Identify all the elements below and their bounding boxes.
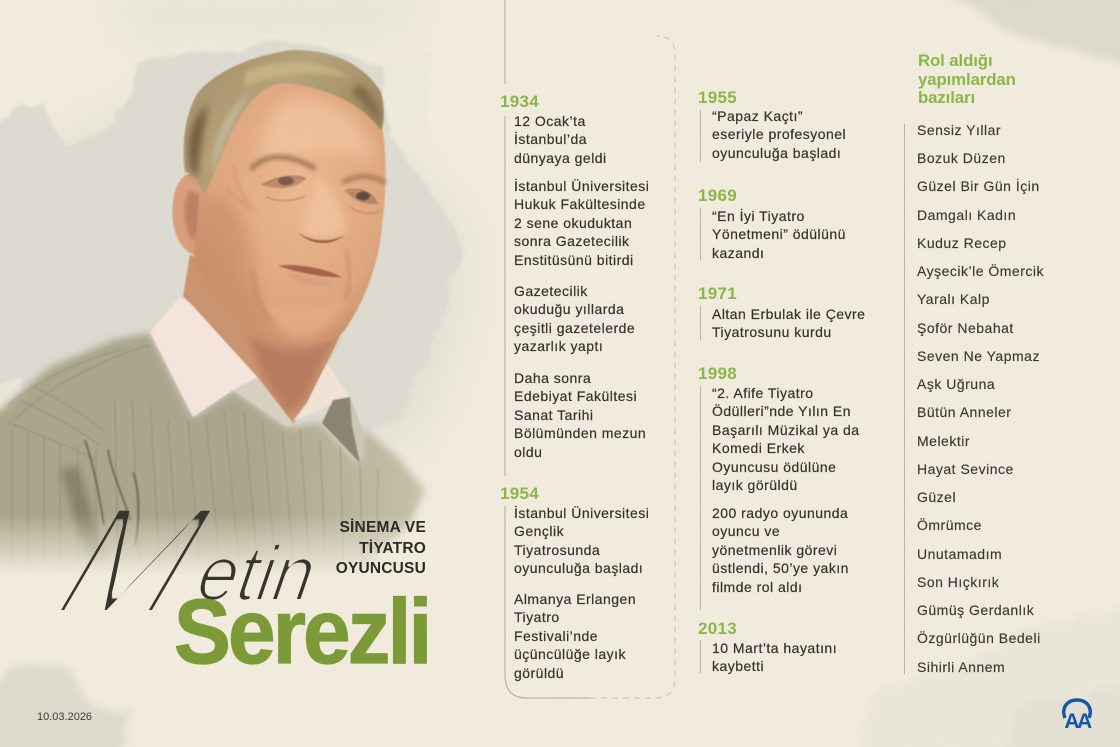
timeline column 1: Enstitüsünü bitirdi [514, 252, 634, 268]
film titles: Unutamadım [917, 546, 1002, 562]
year 1954: 1954 [500, 484, 539, 503]
timeline column 1: Festivali’nde [514, 628, 598, 644]
1971 entry [712, 306, 865, 340]
1998 entries: “2. Afife Tiyatro [712, 385, 814, 401]
1998 entries [712, 385, 860, 494]
timeline column 1: okuduğu yıllarda [514, 301, 624, 317]
1954 entries: Gençlik [514, 523, 564, 539]
1954 entries: oyunculuğa başladı [514, 560, 643, 576]
productions heading [918, 51, 1016, 107]
column 2 line 2013 [700, 640, 701, 673]
year 1971: 1971 [698, 284, 737, 303]
1969 entry: Yönetmeni” ödülünü [712, 226, 846, 242]
shirt collar [150, 297, 362, 463]
timeline column 1: Daha sonra [514, 370, 591, 386]
film titles: Bütün Anneler [917, 404, 1011, 420]
subtitle: profession: SİNEMA VE [340, 519, 426, 536]
year 1934: 1934 [500, 92, 539, 111]
1934 entries: dünyaya geldi [514, 150, 607, 166]
timeline column 2: filmde rol aldı [712, 579, 802, 595]
film titles: Aşk Uğruna [917, 376, 995, 392]
1998 entries: Ödülleri”nde Yılın En [712, 403, 851, 419]
name: Metin (script) [37, 495, 321, 646]
2013 entry: 10 Mart’ta hayatını [712, 640, 837, 656]
1971 entry: Tiyatrosunu kurdu [712, 324, 832, 340]
film titles: Güzel Bir Gün İçin [917, 178, 1040, 194]
timeline column 1: görüldü [514, 665, 564, 681]
timeline connector lines [504, 0, 676, 699]
eyes [262, 176, 380, 213]
1934 entries: İstanbul’da [514, 131, 587, 147]
film titles: Gümüş Gerdanlık [917, 602, 1034, 618]
productions heading: Rol aldığı [918, 51, 993, 70]
timeline column 1: 2 sene okuduktan [514, 215, 632, 231]
name: Metin (script): etin [192, 530, 321, 617]
film titles: Şoför Nebahat [917, 320, 1014, 336]
film titles: Kuduz Recep [917, 235, 1007, 251]
1955 entry [712, 108, 846, 162]
subtitle: profession [336, 518, 426, 577]
film titles: Güzel [917, 489, 956, 505]
timeline column 1: Almanya Erlangen [514, 591, 636, 607]
1954 entries: İstanbul Üniversitesi [514, 505, 649, 521]
2013 entry: kaybetti [712, 658, 764, 674]
timeline column 2: 200 radyo oyununda [712, 505, 848, 521]
1969 entry [712, 208, 846, 261]
productions heading: yapımlardan [918, 70, 1016, 88]
column 2 line 1955 [700, 110, 701, 162]
column 2 line 1969 [700, 208, 701, 260]
timeline column 1: İstanbul Üniversitesi [514, 178, 649, 194]
film titles: Sensiz Yıllar [917, 122, 1001, 138]
date: 10.03.2026 [37, 711, 92, 723]
icon: AA logo [1062, 698, 1092, 730]
timeline column 1: Edebiyat Fakültesi [514, 388, 637, 404]
productions list line [904, 124, 905, 674]
1998 entries: Komedi Erkek [712, 440, 805, 456]
timeline column 2: üstlendi, 50’ye yakın [712, 560, 849, 576]
productions heading: bazıları [918, 88, 975, 107]
timeline column 1: üçüncülüğe layık [514, 646, 626, 662]
hair [183, 50, 384, 194]
name: Serezli: Serezli [174, 580, 430, 680]
column 2 line 1998 [700, 386, 701, 610]
timeline column 2: yönetmenlik görevi [712, 542, 837, 558]
film titles: Seven Ne Yapmaz [917, 348, 1040, 364]
timeline column 1: yazarlık yaptı [514, 338, 603, 354]
film titles: Melektir [917, 433, 970, 449]
1934 entries: 12 Ocak’ta [514, 113, 586, 129]
timeline column 1: Sanat Tarihi [514, 407, 593, 423]
subtitle: profession: OYUNCUSU [336, 560, 426, 577]
timeline column 1 [500, 92, 649, 682]
face shading [198, 99, 375, 338]
year 1955: 1955 [698, 88, 737, 107]
1969 entry: “En İyi Tiyatro [712, 208, 805, 224]
film titles: Son Hıçkırık [917, 574, 999, 590]
column 2 line 1971 [700, 306, 701, 340]
eyebrows [252, 157, 384, 182]
neck [183, 255, 345, 424]
face [194, 70, 386, 345]
1969 entry: kazandı [712, 245, 764, 261]
1954 entries: Tiyatrosunda [514, 542, 600, 558]
sweater [0, 333, 425, 580]
timeline column 1: Bölümünden mezun [514, 425, 646, 441]
year 2013: 2013 [698, 619, 737, 638]
1955 entry: eseriyle profesyonel [712, 126, 846, 142]
year 1969: 1969 [698, 186, 737, 205]
film titles: Bozuk Düzen [917, 150, 1006, 166]
timeline column 1: sonra Gazetecilik [514, 233, 630, 249]
1955 entry: oyunculuğa başladı [712, 145, 841, 161]
film titles: Ömrümce [917, 517, 982, 533]
year 1998: 1998 [698, 364, 737, 383]
timeline column 1: Tiyatro [514, 609, 560, 625]
film titles: Yaralı Kalp [917, 291, 990, 307]
subtitle: profession: TİYATRO [359, 540, 426, 556]
nose [298, 175, 345, 243]
timeline column 1: Hukuk Fakültesinde [514, 196, 646, 212]
ear [172, 172, 212, 256]
1998 entries: Başarılı Müzikal ya da [712, 422, 860, 438]
2013 entry [712, 640, 837, 674]
1955 entry: “Papaz Kaçtı” [712, 108, 803, 124]
timeline column 2: oyuncu ve [712, 523, 780, 539]
timeline column 1: Gazetecilik [514, 283, 588, 299]
film titles: Hayat Sevince [917, 461, 1014, 477]
1998 entries: layık görüldü [712, 477, 798, 493]
1998 entries: Oyuncusu ödülüne [712, 459, 836, 475]
1954 entries [514, 505, 649, 576]
film titles: Özgürlüğün Bedeli [917, 630, 1041, 646]
film titles: Damgalı Kadın [917, 207, 1016, 223]
film titles: Ayşecik’le Ömercik [917, 263, 1044, 279]
film titles: Sihirli Annem [917, 659, 1005, 675]
portrait of Metin Serezli [0, 49, 428, 570]
timeline column 2 [698, 88, 865, 674]
timeline column 1: oldu [514, 444, 542, 460]
1934 entries [514, 113, 607, 166]
mouth [278, 265, 342, 277]
timeline column 1: çeşitli gazetelerde [514, 320, 635, 336]
1971 entry: Altan Erbulak ile Çevre [712, 306, 865, 322]
